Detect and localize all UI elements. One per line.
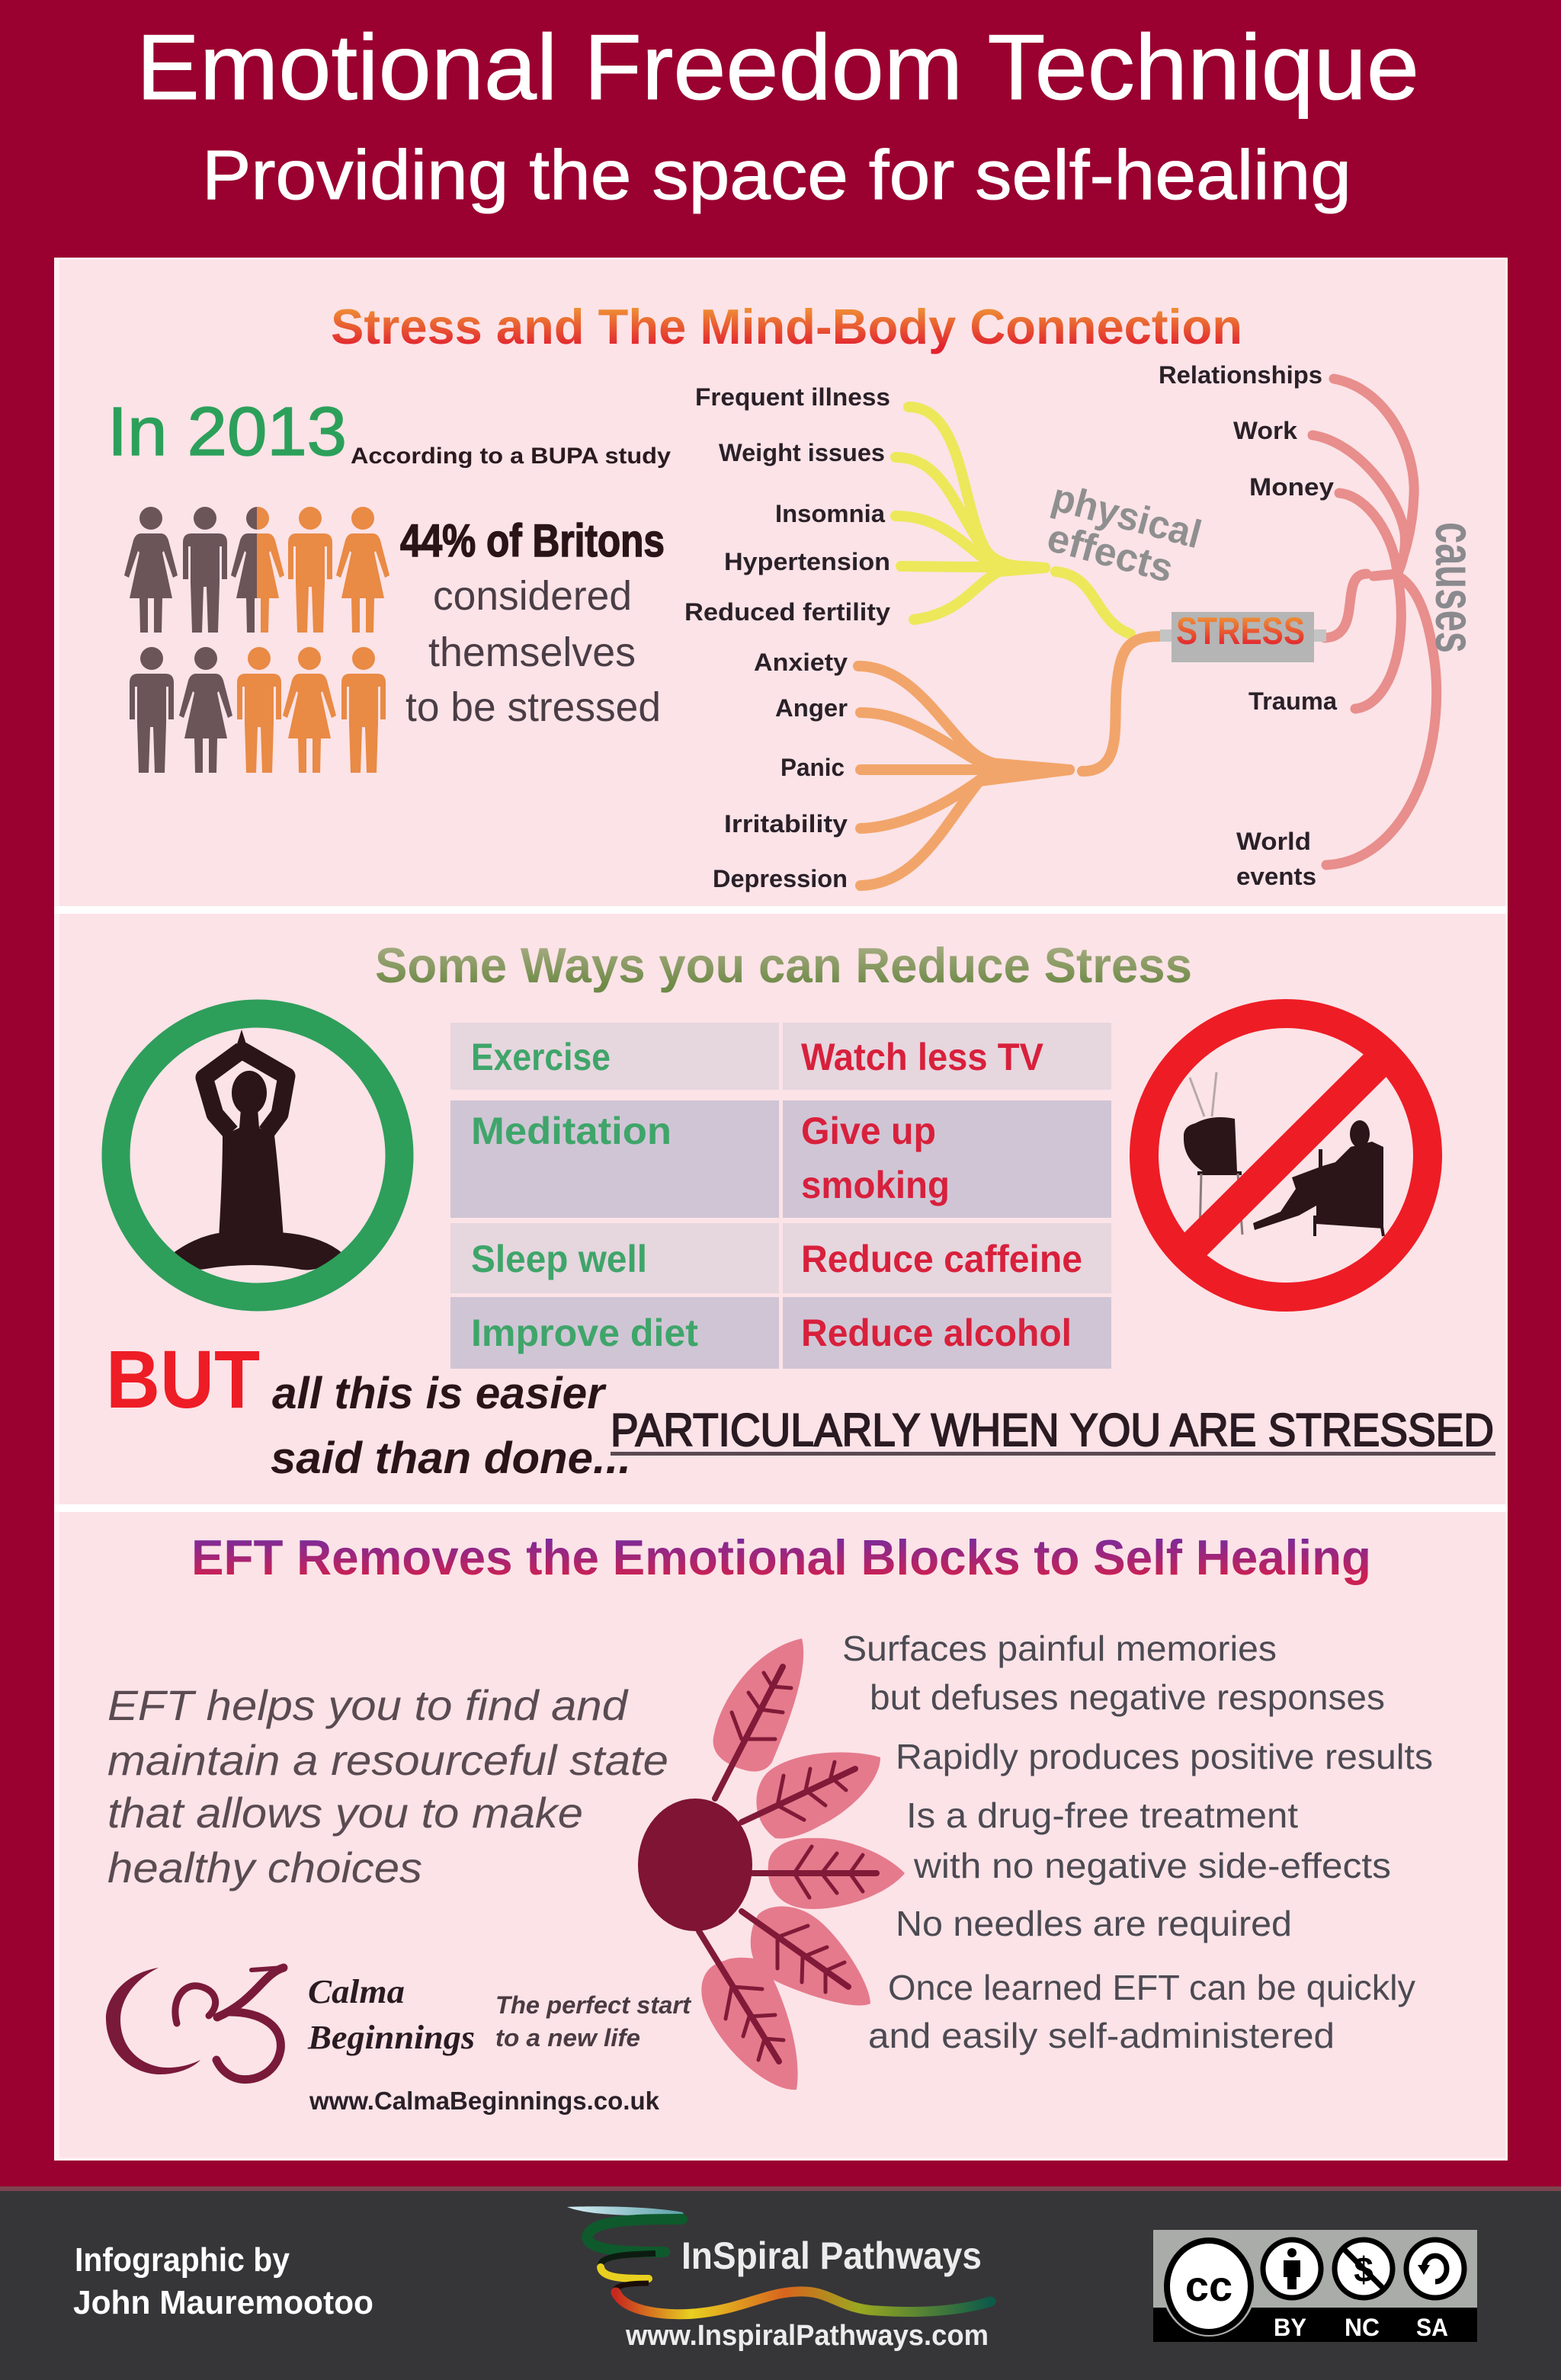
heading: ways: Some Ways you can Reduce Stress: [375, 937, 1192, 993]
badge: creative commons: cc: [1185, 2262, 1232, 2310]
heading: EFT: EFT Removes the Emotional Blocks to Self Healing: [191, 1530, 1371, 1585]
footer: [0, 2186, 1561, 2380]
EFT description: that allows you to make: [107, 1789, 583, 1837]
mind map branches: emotional effects: [858, 636, 1160, 886]
physical effects rotated label: physical: [1047, 476, 1206, 557]
physical effects rotated label: effects: [1043, 516, 1178, 591]
tagline: The perfect start: [495, 1991, 691, 2019]
44% statistic: to be stressed: [405, 684, 661, 730]
emotional effects labels: [713, 649, 848, 892]
habits to reduce: smoking: [801, 1164, 950, 1206]
badge: creative commons: NC: [1345, 2314, 1380, 2341]
physical effects labels: Reduced fertility: [684, 598, 890, 626]
badge: creative commons: $: [1354, 2250, 1373, 2289]
people pictogram: [124, 507, 389, 773]
panel: stress and the mind-body connection: [59, 260, 1505, 906]
easier said than done: all this is easier: [272, 1369, 607, 1418]
physical effects labels: Frequent illness: [695, 383, 890, 411]
positive actions: Meditation: [471, 1110, 672, 1152]
habits to reduce: Give up: [801, 1110, 936, 1152]
badge: creative commons: BY: [1274, 2314, 1306, 2341]
logo: InSpiral Pathways: www.InspiralPathways.com: [625, 2320, 989, 2352]
causes labels: Relationships: [1159, 361, 1322, 389]
divider: [54, 906, 1508, 914]
positive actions: [471, 1036, 698, 1354]
panel: EFT removes emotional blocks: [59, 1512, 1505, 2157]
logo: InSpiral Pathways: InSpiral Pathways: [681, 2234, 982, 2277]
emotional effects labels: Irritability: [724, 810, 848, 838]
subtitle: Providing the space for self-healing: [202, 136, 1351, 214]
44% statistic: themselves: [428, 629, 636, 675]
habits to reduce: [801, 1036, 1082, 1354]
EFT description: EFT helps you to find and: [107, 1681, 629, 1729]
habits to reduce: Reduce alcohol: [801, 1312, 1072, 1354]
EFT description: maintain a resourceful state: [107, 1736, 668, 1784]
badge: creative commons: SA: [1416, 2314, 1448, 2341]
positive actions: Exercise: [471, 1036, 611, 1078]
tagline: [495, 1991, 691, 2052]
icon: meditating figure in green ring: [116, 1014, 399, 1297]
title: Emotional Freedom Technique: [136, 15, 1419, 119]
benefits list: [842, 1629, 1433, 2055]
causes labels: events: [1236, 863, 1316, 890]
physical effects labels: [684, 383, 890, 626]
emotional effects labels: Panic: [780, 754, 845, 781]
positive actions: Improve diet: [471, 1312, 698, 1354]
tagline: to a new life: [495, 2024, 640, 2052]
habits to reduce: Reduce caffeine: [801, 1238, 1082, 1280]
causes rotated label: causes: [1424, 522, 1485, 653]
logo: Calma Beginnings monogram: [106, 1968, 284, 2080]
Calma Beginnings name: [307, 1973, 475, 2056]
panel frame: [54, 258, 1508, 2161]
credit: Infographic by: [75, 2241, 290, 2279]
emotional effects labels: Anxiety: [754, 649, 848, 676]
BUT: BUT: [106, 1333, 260, 1425]
logo: InSpiral Pathways: [567, 2206, 991, 2352]
particularly when stressed: PARTICULARLY WHEN YOU ARE STRESSED: [611, 1405, 1494, 1456]
credit: [73, 2241, 373, 2321]
emotional effects labels: Depression: [713, 865, 848, 892]
causes labels: Trauma: [1248, 687, 1337, 715]
physical effects labels: Hypertension: [724, 548, 890, 575]
easier said than done: [271, 1369, 631, 1483]
benefits list: and easily self-administered: [868, 2016, 1335, 2055]
causes labels: World: [1236, 828, 1311, 855]
table: do and reduce: [450, 1023, 1111, 1369]
benefits list: No needles are required: [896, 1904, 1292, 1943]
in 2013: In 2013: [107, 394, 347, 470]
causes labels: [1159, 361, 1337, 890]
44% statistic: [400, 515, 665, 730]
physical effects labels: Weight issues: [719, 439, 885, 466]
EFT description: healthy choices: [107, 1843, 422, 1892]
causes labels: Work: [1233, 417, 1297, 444]
easier said than done: said than done...: [271, 1433, 631, 1483]
divider: [54, 1504, 1508, 1512]
Calma Beginnings name: Beginnings: [307, 2019, 475, 2056]
badge: creative commons: [1153, 2230, 1477, 2342]
website: www.CalmaBeginnings.co.uk: [309, 2087, 660, 2115]
heading: stress: Stress and The Mind-Body Connection: [331, 299, 1242, 354]
credit: John Mauremootoo: [73, 2284, 373, 2321]
benefits list: Is a drug-free treatment: [906, 1795, 1298, 1835]
panel: ways to reduce stress: [59, 914, 1505, 1504]
44% statistic: 44% of Britons: [400, 515, 665, 566]
benefits list: but defuses negative responses: [870, 1677, 1385, 1717]
Calma Beginnings name: Calma: [308, 1973, 405, 2010]
icon: no TV sign: [1144, 1014, 1428, 1297]
benefits list: Rapidly produces positive results: [896, 1737, 1433, 1776]
physical effects labels: Insomnia: [775, 500, 885, 527]
benefits list: with no negative side-effects: [913, 1846, 1391, 1885]
habits to reduce: Watch less TV: [801, 1036, 1044, 1078]
benefits list: Once learned EFT can be quickly: [888, 1968, 1415, 2007]
44% statistic: considered: [433, 573, 632, 619]
mind map branches: physical effects: [896, 407, 1130, 634]
study source: According to a BUPA study: [351, 444, 671, 469]
causes labels: Money: [1249, 473, 1334, 501]
emotional effects labels: Anger: [775, 694, 848, 722]
EFT description: [107, 1681, 668, 1892]
positive actions: Sleep well: [471, 1238, 647, 1280]
physical effects rotated label: [1043, 476, 1206, 591]
icon: flower of leaves: [638, 1638, 905, 2090]
stress box: STRESS: [1176, 610, 1305, 652]
benefits list: Surfaces painful memories: [842, 1629, 1277, 1668]
mind map branches: causes: [1313, 379, 1437, 865]
